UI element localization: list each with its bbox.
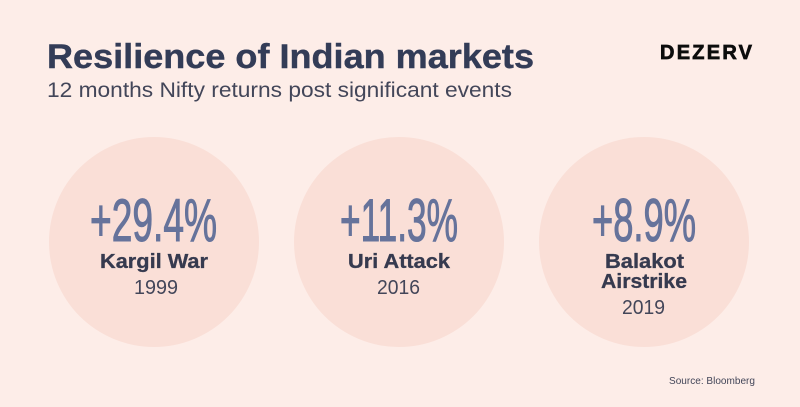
event name: Balakot Airstrike: Balakot bbox=[605, 251, 684, 273]
year: 1999: 1999 bbox=[134, 277, 178, 299]
value: +11.3%: +11.3% bbox=[340, 187, 458, 254]
subtitle: 12 months Nifty returns post significant events bbox=[47, 79, 512, 102]
year: 2016: 2016 bbox=[377, 277, 420, 299]
value: +29.4%: +29.4% bbox=[90, 187, 217, 254]
event name: Balakot Airstrike bbox=[601, 251, 687, 293]
circle: Uri Attack bbox=[294, 137, 504, 347]
event name: Uri Attack: Uri Attack bbox=[348, 251, 451, 273]
event name: Kargil War: Kargil War bbox=[100, 251, 208, 273]
logo: Dezerv: DEZERV bbox=[660, 42, 753, 64]
panel: Uri Attack bbox=[294, 137, 504, 347]
year: 2019: 2019 bbox=[622, 297, 665, 319]
title: Resilience of Indian markets bbox=[47, 38, 534, 76]
source note: Source: Bloomberg bbox=[669, 376, 755, 387]
circle: Balakot Airstrike bbox=[539, 137, 749, 347]
event name: Balakot Airstrike: Airstrike bbox=[601, 271, 687, 293]
circle: Kargil War bbox=[49, 137, 259, 347]
value: +8.9%: +8.9% bbox=[592, 187, 696, 254]
panel: Kargil War bbox=[49, 137, 259, 347]
panel: Balakot Airstrike bbox=[539, 137, 749, 347]
